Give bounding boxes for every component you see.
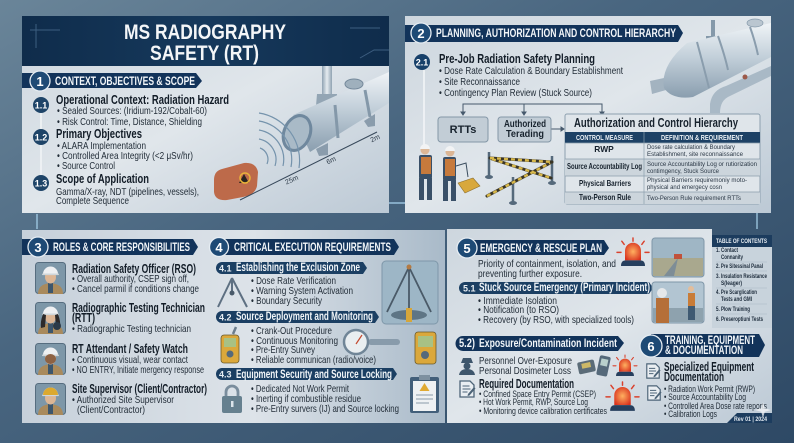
role: site supervisor: • Authorized Site Supervisor <box>72 394 174 406</box>
table: authorization and control hierarchy: Establishment, site reconnaissance <box>647 151 743 158</box>
icon: document 2 <box>647 364 661 378</box>
section 1 heading <box>22 71 202 91</box>
box: authorized trading <box>498 117 551 142</box>
illustration: pipe with radiation source: 2m <box>370 134 381 144</box>
panel: table of contents: 5. Plow Training <box>716 306 750 313</box>
section 5 heading: EMERGENCY & RESCUE PLAN <box>480 243 602 255</box>
sparkle <box>755 402 771 418</box>
section 6 heading: & DOCUMENTATION <box>665 345 743 357</box>
documentation list: • Calibration Logs <box>664 409 717 420</box>
2.1 pre-job planning: • Contingency Plan Review (Stuck Source) <box>439 87 592 99</box>
1.2 primary objectives: • Source Control <box>57 160 115 172</box>
4.1 exclusion zone: • Warning System Activation <box>251 285 353 297</box>
table: authorization and control hierarchy: contimgency, Stuck Source <box>647 168 719 175</box>
arrows to boxes <box>461 104 604 131</box>
title banner: MS RADIOGRAPHY <box>124 21 286 44</box>
icon: person <box>459 358 475 375</box>
text: priority: Priority of containment, isolation, and <box>478 258 616 270</box>
title banner: SAFETY (RT) <box>150 42 259 65</box>
panel: table of contents: 6. Preseroptiuni Tests <box>716 316 763 323</box>
role: site supervisor: (Client/Contractor) <box>77 404 145 416</box>
icon: alarm large <box>606 382 639 411</box>
icons: dosimeters <box>577 355 611 377</box>
table: authorization and control hierarchy: Source Accountability Log <box>567 161 642 171</box>
1.1 operational context: Operational Context: Radiation Hazard <box>56 93 229 107</box>
5.1 stuck source emergency <box>459 282 653 326</box>
table: authorization and control hierarchy: CONTROL MEASURE <box>576 133 633 142</box>
section 2 heading: PLANNING, AUTHORIZATION AND CONTROL HIERARCHY <box>436 28 676 40</box>
specialized equipment documentation <box>664 360 755 384</box>
1.1 operational context: • Sealed Sources: (Iridium-192/Cobalt-60) <box>57 105 207 117</box>
4.3 equipment security <box>216 368 399 415</box>
table: authorization and control hierarchy: Two-Person Rule requirement RTTs <box>647 195 742 202</box>
1.2 primary objectives: Primary Objectives <box>56 127 142 141</box>
section 1 heading: 1 <box>36 74 44 89</box>
5.1 stuck source emergency: • Notification (to RSO) <box>478 304 559 316</box>
section 4 heading: 4 <box>215 240 223 255</box>
5.2 exposure incident: Exposure/Contamination Incident <box>479 338 617 350</box>
section 4 heading <box>210 238 399 256</box>
box: authorized trading: Terading <box>506 128 544 140</box>
icon: alarm small <box>613 355 637 376</box>
role: site supervisor: Site Supervisor (Client/Contractor) <box>72 382 207 396</box>
illustration: barrier tape <box>485 152 556 205</box>
1.2 primary objectives <box>33 127 193 172</box>
required documentation: • Hot Work Permit, RWP, Source Log <box>479 397 588 408</box>
1.3 scope: Complete Sequence <box>56 195 129 207</box>
1.1 operational context: 1.1 <box>35 100 47 110</box>
panel: table of contents: S(Ieager) <box>721 280 742 287</box>
section 6 heading: TRAINING, EQUIPMENT <box>665 335 755 347</box>
documentation list: • Radiation Work Permit (RWP) <box>664 384 755 395</box>
panel: title and context <box>22 16 389 213</box>
image: workers communicating <box>652 282 704 323</box>
illustration: workers with source container <box>419 144 480 201</box>
table: authorization and control hierarchy: Source Accountability Log or rutiorization <box>647 161 757 168</box>
2.1 pre-job planning <box>414 52 623 145</box>
panel: table of contents: 1. Contact <box>716 247 739 254</box>
4.3 equipment security: 4.3 <box>219 370 232 380</box>
title banner <box>22 16 389 66</box>
box: RTTs: RTTs <box>450 124 476 136</box>
2.1 pre-job planning: • Site Reconnaissance <box>439 76 520 88</box>
5.1 stuck source emergency: Stuck Source Emergency (Primary Incident) <box>479 282 650 294</box>
table: authorization and control hierarchy: Physical Barriers <box>579 178 631 188</box>
4.2 source deployment: • Pre-Entry Survey <box>251 344 316 356</box>
1.2 primary objectives: 1.2 <box>35 132 47 142</box>
role: site supervisor <box>36 382 207 416</box>
1.2 primary objectives: • Controlled Area Integrity (<2 μSv/hr) <box>57 150 193 162</box>
table: authorization and control hierarchy <box>565 114 760 204</box>
4.1 exclusion zone: • Boundary Security <box>251 295 323 307</box>
section 4 heading: CRITICAL EXECUTION REQUIREMENTS <box>234 242 391 254</box>
panel: table of contents: 3. Insulation Resistance <box>716 273 767 280</box>
panel: table of contents: Tests and GMI <box>721 296 752 303</box>
illustration: pipe with radiation source: 25m <box>284 174 300 187</box>
icon: document <box>460 381 476 397</box>
1.3 scope: Gamma/X-ray, NDT (pipelines, vessels), <box>56 186 199 198</box>
required documentation: Required Documentation <box>479 377 574 391</box>
5.1 stuck source emergency: • Immediate Isolation <box>478 295 557 307</box>
section 5 heading <box>457 238 609 258</box>
icon: survey meter <box>221 327 239 363</box>
role: RT attendant <box>36 342 204 376</box>
documentation list <box>664 384 767 420</box>
box: authorized trading: Authorized <box>504 118 546 130</box>
table: authorization and control hierarchy: Authorization and Control Hierarchy <box>574 115 739 130</box>
text: personnel: Personal Dosimeter Loss <box>479 365 571 377</box>
role: radiation safety officer <box>36 262 199 295</box>
role: radiographic testing technician: • Radiographic Testing technician <box>72 323 191 335</box>
role: radiographic testing technician: (RTT) <box>72 311 95 325</box>
5.2 exposure incident <box>456 336 624 351</box>
5.1 stuck source emergency: • Recovery (by RSO, with specialized tools) <box>478 314 634 326</box>
icon: lock <box>222 386 242 413</box>
section 2 heading: 2 <box>417 26 425 41</box>
role: RT attendant: RT Attendant / Safety Watch <box>72 342 188 356</box>
role: radiation safety officer: Radiation Safety Officer (RSO) <box>72 262 196 276</box>
2.1 pre-job planning: • Dose Rate Calculation & Boundary Establishment <box>439 65 623 77</box>
section 6 heading: 6 <box>647 339 655 354</box>
4.1 exclusion zone: 4.1 <box>219 264 232 274</box>
icon: clipboard <box>410 375 439 413</box>
icon: gauge <box>344 330 400 354</box>
icon: alarm beacon <box>617 238 649 266</box>
table: authorization and control hierarchy: DEFINITION & REQUIREMENT <box>661 133 743 142</box>
image: tripod over manhole <box>382 261 438 324</box>
section 6 heading <box>640 334 765 357</box>
1.3 scope: 1.3 <box>35 178 47 188</box>
4.1 exclusion zone: • Dose Rate Verification <box>251 275 336 287</box>
1.3 scope: Scope of Application <box>56 172 149 186</box>
section 3 heading: 3 <box>34 240 42 255</box>
role: radiographic testing technician <box>36 301 205 335</box>
section 5 heading: 5 <box>463 241 471 256</box>
5.2 exposure incident: 5.2) <box>459 338 475 350</box>
connector glows <box>37 203 757 229</box>
icon: document 3 <box>648 386 662 400</box>
role: radiation safety officer: • Overall authority, CSEP sign off, <box>72 273 189 285</box>
section 3 heading: ROLES & CORE RESPONSIBILITIES <box>53 242 190 254</box>
toc header: TABLE OF CONTENTS <box>716 238 767 245</box>
revision tag: Rev 01 | 2024 <box>734 417 768 423</box>
2.1 pre-job planning: Pre-Job Radiation Safety Planning <box>439 52 595 66</box>
4.2 source deployment: Source Deployment and Monitoring <box>236 311 373 323</box>
documentation list: • Source Accountability Log <box>664 392 746 403</box>
4.3 equipment security: • Dedicated Not Work Permit <box>251 383 349 395</box>
role: RT attendant: • NO ENTRY, Initiate mergency response <box>72 364 204 376</box>
text: personnel <box>479 355 572 377</box>
4.3 equipment security: • Pre-Entry survers (IJ) and Source locking <box>251 403 399 415</box>
role: RT attendant: • Continuous visual, wear contact <box>72 354 188 366</box>
2.1 pre-job planning: 2.1 <box>416 58 428 68</box>
image: site road <box>652 238 704 277</box>
required documentation: • Confined Space Entry Permit (CSEP) <box>479 389 596 400</box>
table: authorization and control hierarchy: RWP <box>594 144 614 154</box>
illustration: pipe with radiation source: 6m <box>326 156 337 166</box>
4.3 equipment security: Equipment Security and Source Locking <box>236 369 392 381</box>
1.2 primary objectives: • ALARA Implementation <box>57 140 146 152</box>
required documentation: • Monitoring device calibration certificates <box>479 406 607 417</box>
1.1 operational context <box>33 93 229 176</box>
illustration: pipe with radiation source <box>214 66 389 200</box>
icon: survey meter right <box>415 332 436 364</box>
text: priority <box>478 258 616 280</box>
4.2 source deployment: • Crank-Out Procedure <box>251 325 332 337</box>
table: authorization and control hierarchy: physical and emergecy cosn <box>647 184 722 191</box>
panel: planning, authorization and control hierarchy <box>405 16 771 213</box>
table: authorization and control hierarchy: Dose rate calculation & Boundary <box>647 144 736 151</box>
4.1 exclusion zone: Establishing the Exclusion Zone <box>236 262 360 274</box>
panel: roles and execution <box>22 230 445 423</box>
section 1 heading: CONTEXT, OBJECTIVES & SCOPE <box>55 76 195 88</box>
4.2 source deployment: 4.2 <box>219 312 232 322</box>
panel: table of contents: 2. Pre Sitessinal Panal <box>716 263 763 270</box>
required documentation <box>479 377 607 417</box>
4.2 source deployment <box>216 311 379 366</box>
box: RTTs <box>438 117 488 142</box>
specialized equipment documentation: Documentation <box>664 370 724 384</box>
table: authorization and control hierarchy: Physical Barriers requiremoniy moto- <box>647 177 747 184</box>
revision tag <box>727 413 772 423</box>
table: authorization and control hierarchy: Two-Person Rule <box>579 192 631 202</box>
4.2 source deployment: • Reliable communican (radio/voice) <box>251 354 376 366</box>
1.3 scope <box>33 172 199 207</box>
5.1 stuck source emergency: 5.1 <box>463 284 476 294</box>
text: priority: preventing further exposure. <box>478 268 582 280</box>
section 2 heading <box>405 23 683 43</box>
panel: table of contents: 4. Pre Scarglication <box>716 289 757 296</box>
4.1 exclusion zone <box>216 262 367 307</box>
role: radiographic testing technician: Radiographic Testing Technician <box>72 301 205 315</box>
4.2 source deployment: • Continuous Monitoring <box>251 335 338 347</box>
section 3 heading <box>22 237 198 257</box>
panel: table of contents: Connanity <box>721 254 743 261</box>
4.3 equipment security: • Inerting if combustible residue <box>251 393 361 405</box>
text: personnel: Personnel Over-Exposure <box>479 355 572 367</box>
1.1 operational context: • Risk Control: Time, Distance, Shielding <box>57 116 202 128</box>
role: radiation safety officer: • Cancel parmil if conditions change <box>72 283 199 295</box>
illustration: vessel <box>650 19 771 113</box>
panel: table of contents <box>712 235 772 328</box>
panel: emergency and rescue plan <box>447 229 772 423</box>
